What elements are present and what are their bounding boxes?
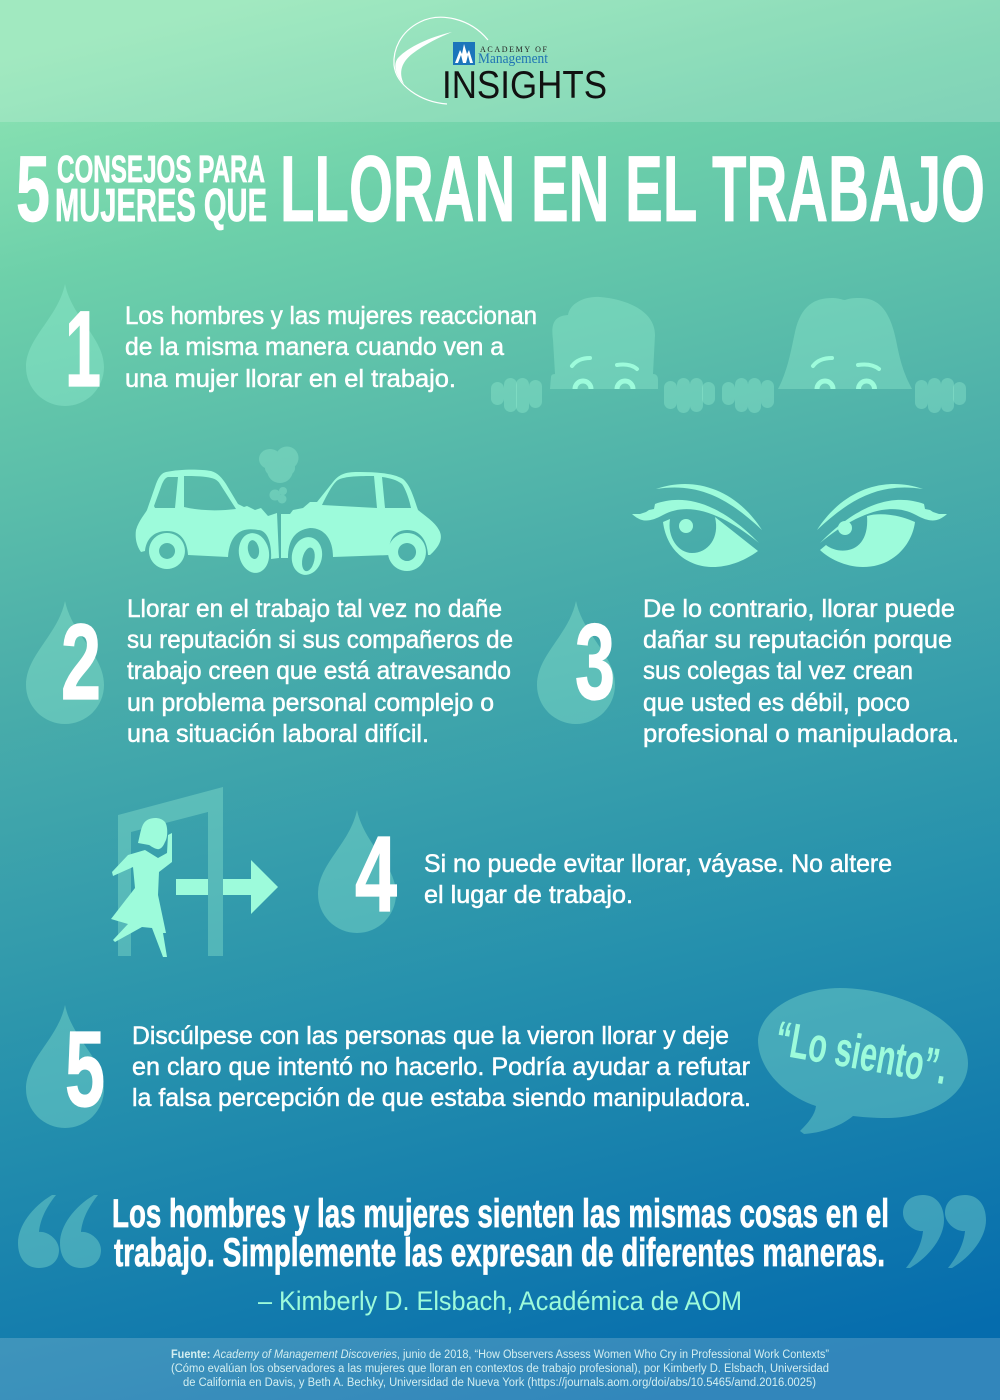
text: tip 5: Discúlpese con las personas que la vieron llorar y deje bbox=[132, 1022, 729, 1050]
logo: Academy of Management Insights: ACADEMY OF bbox=[480, 45, 548, 54]
icon: closing quotation mark bbox=[903, 1195, 986, 1268]
quote text bbox=[112, 1192, 889, 1275]
quote bbox=[18, 1192, 986, 1316]
text: tip 3: profesional o manipuladora. bbox=[643, 720, 959, 748]
title: MUJERES QUE bbox=[55, 179, 267, 231]
text: tip 3 bbox=[643, 595, 959, 748]
icon: drop 5 bbox=[26, 1005, 104, 1128]
icon: drop 4 bbox=[318, 810, 396, 933]
text: tip 3: De lo contrario, llorar puede bbox=[643, 595, 955, 623]
title: CONSEJOS PARA bbox=[57, 149, 265, 191]
source note: Fuente: Academy of Management Discoveries, junio de 2018, “How Observers Assess Women Who Cry in Professional Work Contexts” bbox=[171, 1349, 829, 1361]
text: tip 3: que usted es débil, poco bbox=[643, 689, 910, 717]
icon: eyes bbox=[632, 484, 947, 567]
text: tip 5: la falsa percepción de que estaba siendo manipuladora. bbox=[132, 1084, 751, 1112]
text: tip 3: sus colegas tal vez crean bbox=[643, 657, 913, 685]
header band bbox=[0, 0, 1000, 122]
icon: drop 2 bbox=[26, 601, 104, 724]
text: tip 3: dañar su reputación porque bbox=[643, 626, 952, 654]
attribution: – Kimberly D. Elsbach, Académica de AOM bbox=[258, 1286, 742, 1316]
door frame bbox=[118, 787, 223, 956]
number 1: 1 bbox=[65, 288, 101, 409]
logo: Academy of Management Insights: Management bbox=[478, 51, 548, 67]
text: tip 1 bbox=[125, 302, 537, 393]
source note: de California en Davis, y Beth A. Bechky, Universidad de Nueva York (https://journals.aom.org/doi/abs/10.5465/amd.2016.0025) bbox=[183, 1377, 816, 1389]
text: tip 2: su reputación si sus compañeros de bbox=[127, 626, 513, 654]
text: tip 2 bbox=[127, 595, 513, 748]
icon: car crash bbox=[136, 446, 441, 578]
text: tip 2: trabajo creen que está atravesando bbox=[127, 657, 511, 685]
icon: woman leaving through door bbox=[111, 787, 278, 957]
source note: (Cómo evalúan los observadores a las mujeres que lloran en contextos de trabajo profesional), por Kimberly D. Elsbach, Universidad bbox=[171, 1363, 829, 1375]
text: tip 1: de la misma manera cuando ven a bbox=[125, 333, 504, 361]
left car bbox=[136, 470, 279, 559]
text: tip 2: una situación laboral difícil. bbox=[127, 720, 429, 748]
number 5: 5 bbox=[65, 1008, 105, 1129]
tip 5 bbox=[26, 1005, 751, 1129]
left eye bbox=[632, 484, 762, 567]
tip 4 bbox=[318, 810, 892, 934]
text: tip 5: en claro que intentó no hacerlo. Podría ayudar a refutar bbox=[132, 1053, 750, 1081]
smoke bbox=[259, 446, 298, 504]
title: 5 bbox=[16, 136, 50, 241]
icon: opening quotation mark bbox=[18, 1195, 101, 1268]
number 4: 4 bbox=[355, 813, 397, 934]
text: tip 5 bbox=[132, 1022, 751, 1112]
arrow bbox=[176, 860, 278, 914]
tip 3 bbox=[537, 595, 959, 748]
logo: Academy of Management Insights bbox=[394, 17, 607, 107]
text: tip 4 bbox=[424, 850, 892, 909]
text: tip 4: Si no puede evitar llorar, váyase. No altere bbox=[424, 850, 892, 878]
tip 1 bbox=[26, 284, 537, 409]
icon: peeking woman bbox=[722, 298, 966, 413]
text: tip 1: Los hombres y las mujeres reaccionan bbox=[125, 302, 537, 330]
number 2: 2 bbox=[61, 601, 101, 722]
number 3: 3 bbox=[575, 601, 615, 722]
icon: drop 1 bbox=[26, 284, 104, 406]
woman bbox=[111, 818, 172, 957]
text: tip 4: el lugar de trabajo. bbox=[424, 881, 633, 909]
right eye bbox=[817, 484, 947, 567]
icon: drop 3 bbox=[537, 601, 615, 724]
text: tip 2: Llorar en el trabajo tal vez no dañe bbox=[127, 595, 502, 623]
speech bubble bbox=[758, 988, 968, 1134]
right car bbox=[281, 472, 441, 558]
logo: Academy of Management Insights: INSIGHTS bbox=[442, 64, 607, 107]
text: tip 1: una mujer llorar en el trabajo. bbox=[125, 365, 456, 393]
footer band bbox=[0, 1338, 1000, 1400]
tip 2 bbox=[26, 595, 513, 748]
source note bbox=[171, 1349, 829, 1389]
text: tip 2: un problema personal complejo o bbox=[127, 689, 494, 717]
icon: peeking man bbox=[491, 297, 715, 413]
